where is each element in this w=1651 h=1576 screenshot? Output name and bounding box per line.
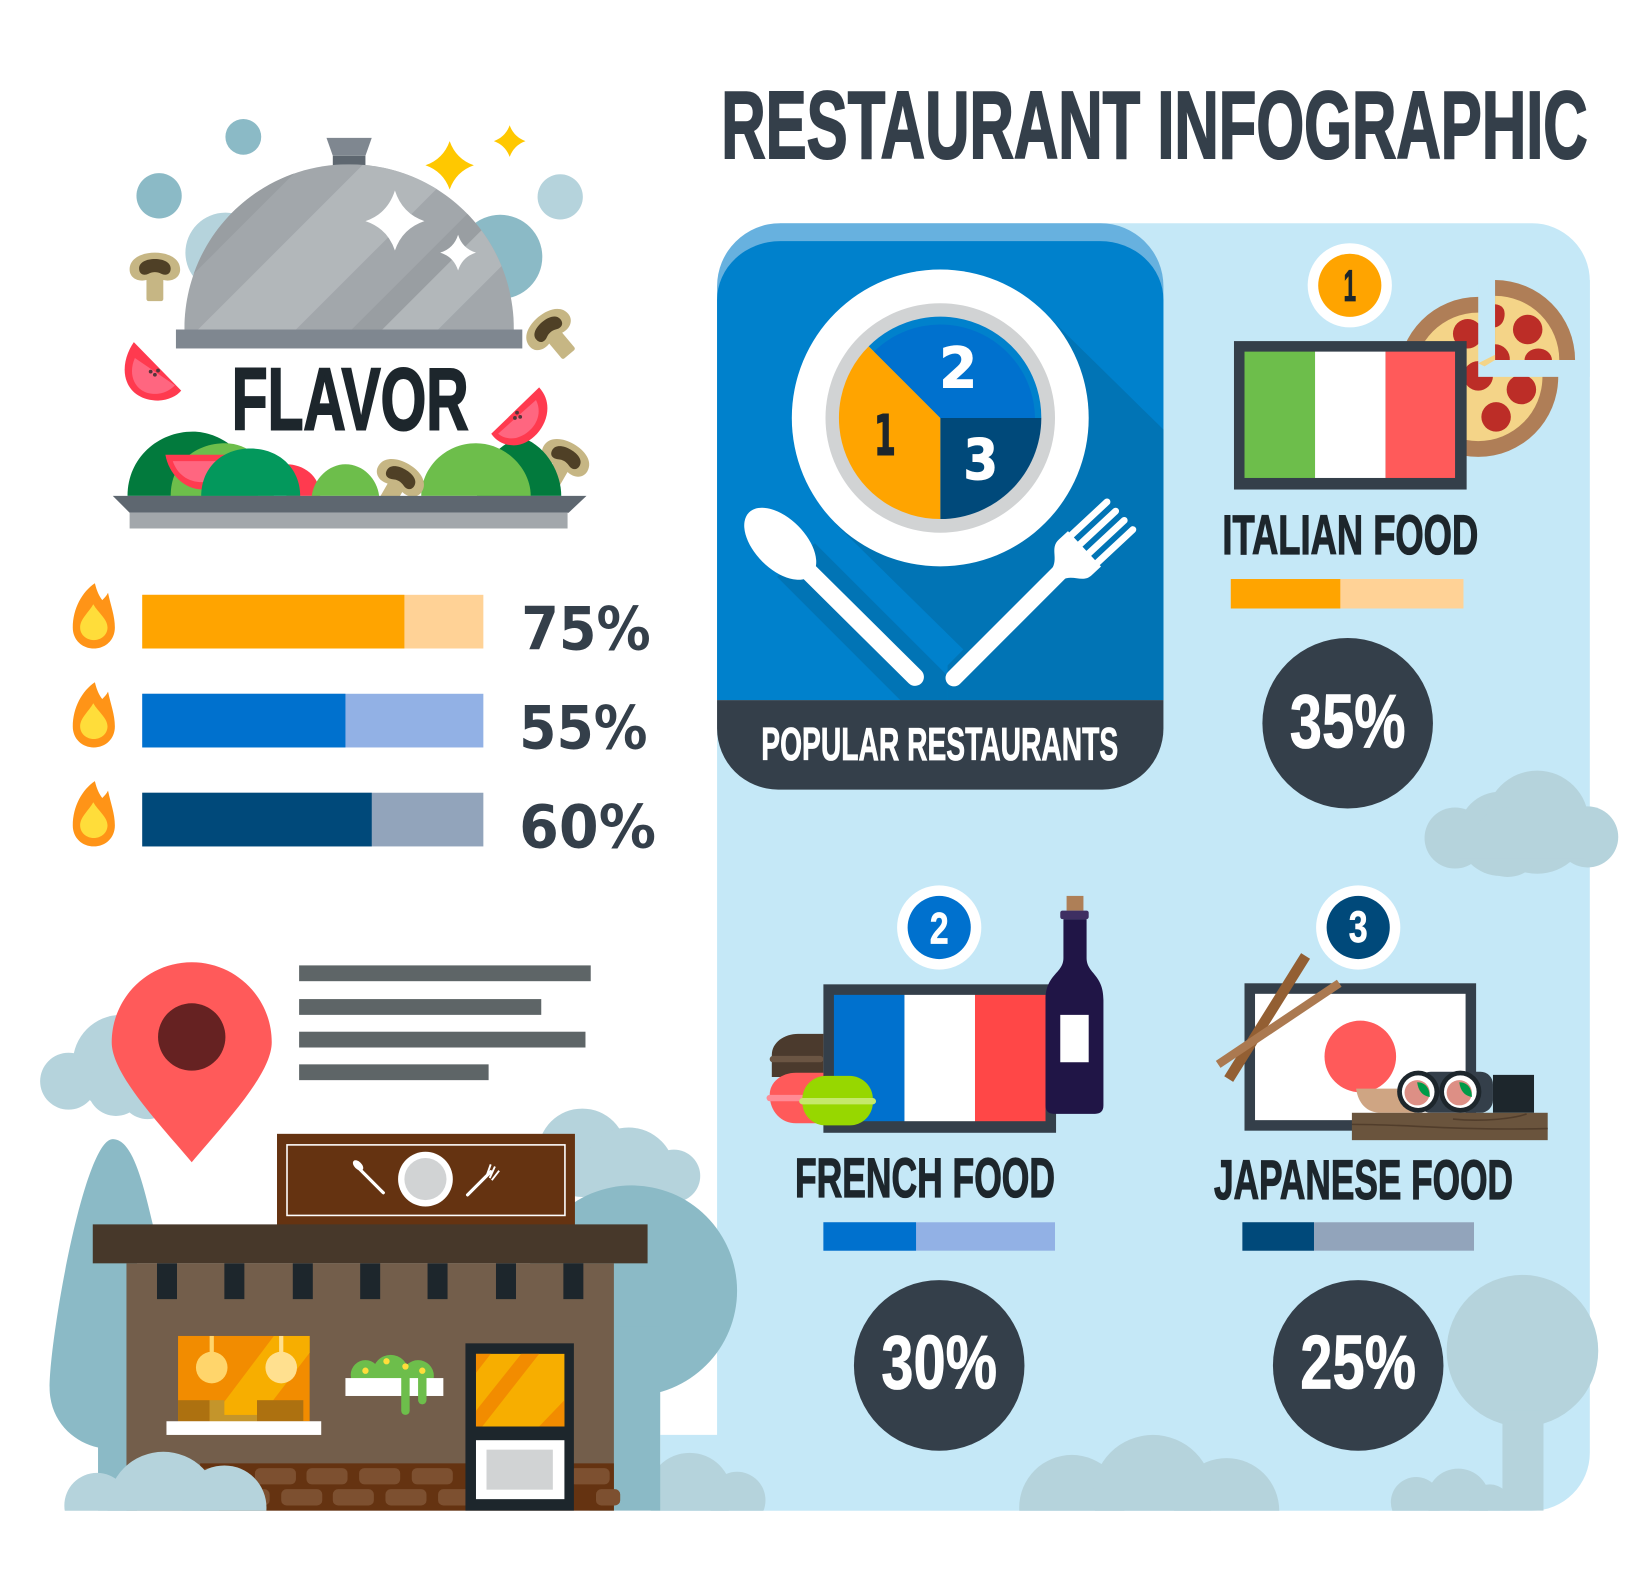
tree left [50,1139,153,1511]
mushroom on salad [363,452,430,519]
macarons [767,1034,876,1125]
cloud behind pin [40,1015,175,1119]
fork [954,498,1136,678]
cloud: bottom left of panel [650,1453,766,1511]
card footer [717,700,1163,790]
long shadows [777,314,1163,700]
pie labels [874,336,998,493]
heading: FRENCH FOOD [795,1146,1055,1209]
sushi set [1352,1071,1548,1140]
bar [142,793,483,846]
flame icon [73,682,115,747]
rank badge 1 [1308,243,1392,327]
background clouds and tree on panel [648,771,1618,1563]
progress bar [1231,579,1463,609]
pie chart on plate [839,317,1041,519]
cloud behind shop [542,1108,700,1200]
japanese flag [1250,989,1471,1125]
cloche rim [176,330,522,348]
rank badge 2 [897,885,981,970]
flavor heading: FLAVOR [232,350,469,449]
section: italian food [1222,243,1590,809]
cloud: bottom centre [1019,1435,1280,1511]
percent circle: 30% [881,1321,997,1406]
cloud: bottom right [1390,1468,1510,1511]
percent circle: 25% [1300,1321,1416,1406]
tomato slice left [125,342,181,401]
cloud in front of shop [64,1452,266,1511]
mushroom behind greens [528,432,596,499]
french flag [823,984,1056,1133]
pie labels: 3 [963,428,998,493]
percent circle [854,1280,1024,1451]
rank badge 2: 2 [930,904,949,953]
heading: ITALIAN FOOD [1222,503,1478,566]
rank badge 3 [1316,885,1400,970]
salad greens [128,432,561,496]
mushroom left [130,253,180,301]
restaurant scene [50,1108,737,1511]
progress bar [823,1222,1055,1251]
panel: popular restaurants card [717,223,1163,790]
roof [93,1224,648,1263]
bar row 55% [73,682,648,764]
spoon [731,495,915,677]
percent circle [1273,1280,1443,1451]
italian flag [1234,341,1467,490]
tree right [527,1185,737,1511]
panel: light blue background [660,223,1590,1511]
plate [792,270,1089,566]
rank badge 1: 1 [1343,262,1356,311]
tree: right [1447,1275,1598,1511]
illustration: cloche with flavor [112,119,590,528]
planter [345,1355,443,1415]
section: french food [767,885,1103,1451]
address text lines [299,965,591,1080]
card footer label: POPULAR RESTAURANTS [761,718,1118,770]
cloche dome [184,164,514,330]
serving tray [113,496,587,528]
progress bar [1242,1222,1474,1251]
flame icon [73,583,115,649]
percent circle [1262,638,1433,809]
pizza [1398,280,1590,457]
percent circle: 35% [1290,679,1406,764]
value: 55% [519,694,648,764]
flame icon [73,781,115,846]
value: 60% [519,792,656,862]
cloche knob [326,138,372,166]
shop wall [126,1263,614,1511]
wine bottle [1046,896,1103,1114]
card body [717,241,1163,700]
shop sign [277,1134,575,1225]
bar row 60% [73,781,656,862]
tomato slice right [491,387,547,445]
mushroom right [519,301,589,371]
location pin [112,962,272,1162]
section: japanese food [1214,885,1548,1451]
pie labels: 1 [874,404,896,469]
sparkles [365,125,525,271]
chopsticks [1218,956,1339,1079]
brick base [200,1463,620,1511]
door [465,1343,574,1511]
card top highlight [717,223,1163,700]
bar [142,595,483,649]
pie labels: 2 [939,336,977,401]
cloud: upper right [1425,771,1618,877]
bar [142,694,483,747]
flavor bars [73,583,656,862]
value: 75% [521,595,651,665]
decorative circles [136,119,583,299]
rank badge 3: 3 [1349,903,1368,952]
shop window [166,1336,321,1435]
corbels [157,1263,583,1299]
bar row 75% [73,583,651,665]
